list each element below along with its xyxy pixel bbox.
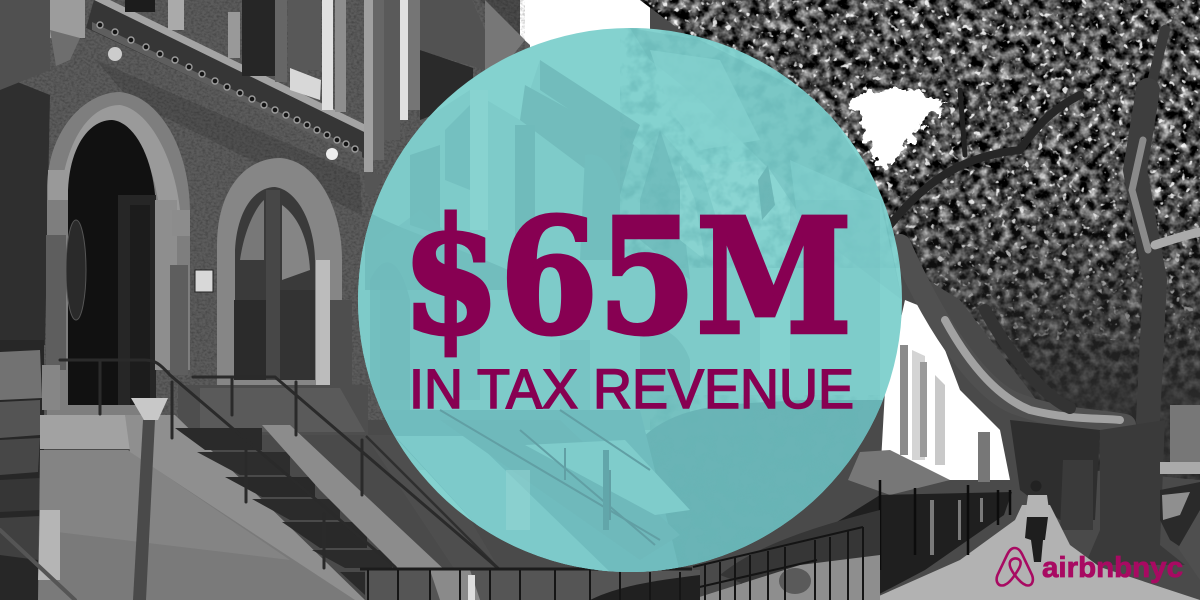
faded tree foliage inside circle <box>620 28 902 300</box>
teal circle overlay with faded photo <box>358 28 902 572</box>
sky gap above the street <box>520 0 650 60</box>
iron railings <box>0 360 500 600</box>
ground behind the fence <box>690 555 880 600</box>
window archway <box>217 158 352 410</box>
lamp post on the stoop <box>131 398 168 600</box>
dark foliage under the main branch <box>1010 420 1100 520</box>
main trunk <box>1085 420 1185 565</box>
cornice dentils <box>97 22 358 152</box>
stair treads <box>175 428 400 595</box>
lighter sky band on right of circle <box>790 160 894 268</box>
sidewalk <box>870 505 1200 600</box>
faded building facade inside circle <box>358 60 800 470</box>
lower stoop with iron rail <box>365 570 700 600</box>
pilasters and corbels <box>50 0 525 198</box>
wordmark: airbnbnyc <box>1042 552 1183 584</box>
faded street trees lower right <box>640 395 890 572</box>
icon: airbnb belo <box>997 548 1033 586</box>
windows on the upper storey <box>125 0 346 112</box>
rusticated stone base <box>0 340 368 600</box>
faded lower facade and text backdrop <box>380 200 880 440</box>
faded stoop and railings lower left <box>370 410 690 572</box>
distant row houses <box>848 345 990 495</box>
neighbouring stoop <box>262 425 480 600</box>
plaque beside the door <box>195 270 213 292</box>
planter <box>779 568 811 594</box>
headline: $65M: $65M <box>402 185 852 370</box>
plane tree trunks and branches <box>890 30 1200 425</box>
woman walking on the sidewalk <box>1025 480 1050 562</box>
sky opening through the leaves <box>850 90 1010 480</box>
shrub behind the fence <box>720 510 880 590</box>
iron fence along the street <box>360 480 1012 600</box>
brand logo <box>997 548 1183 586</box>
door archway <box>46 92 190 420</box>
brownstone facade, upper storey <box>0 0 530 600</box>
front stoop with steps <box>38 415 500 600</box>
far trunks and foliage <box>1060 405 1200 530</box>
wall lamps <box>108 47 338 160</box>
parked cars <box>1160 482 1200 580</box>
tree canopy <box>640 0 1200 480</box>
subheading: in tax revenue: IN TAX REVENUE <box>409 357 854 420</box>
fence bays with light showing through <box>930 498 983 555</box>
